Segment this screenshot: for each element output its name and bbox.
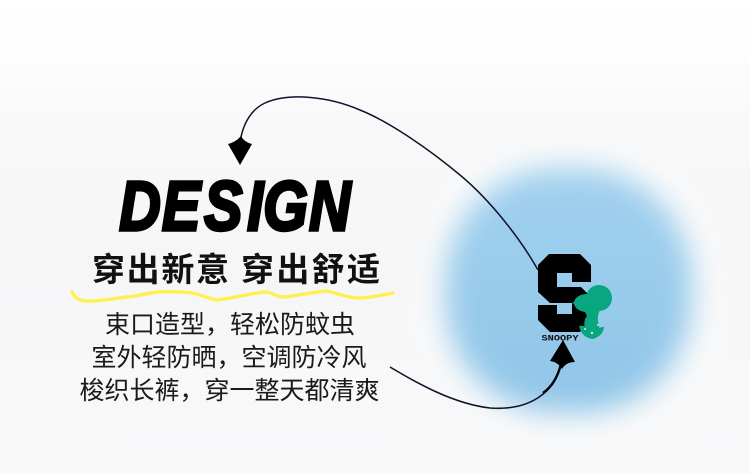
subtitle [92, 251, 380, 288]
body text [79, 311, 380, 405]
letter S [538, 254, 591, 332]
logo: Snoopy S [538, 254, 612, 344]
white halo around glow [420, 140, 720, 440]
yellow underline [72, 291, 393, 301]
title: DESIGN: DESIGN [119, 167, 352, 245]
blue glow circle [445, 168, 692, 413]
line 3: 梭织长裤，穿一整天都清爽 [79, 377, 380, 405]
Snoopy silhouette [572, 285, 612, 339]
line 2: 室外轻防晒，空调防冷风 [91, 344, 367, 372]
subtitle right: 穿出舒适 [241, 251, 380, 288]
arrow: curve to heading [228, 97, 538, 270]
subtitle left: 穿出新意 [92, 251, 229, 288]
arrow: curve to logo [390, 340, 575, 408]
SNOOPY wordmark: SNOOPY [542, 334, 580, 344]
line 1: 束口造型，轻松防蚊虫 [105, 311, 355, 339]
